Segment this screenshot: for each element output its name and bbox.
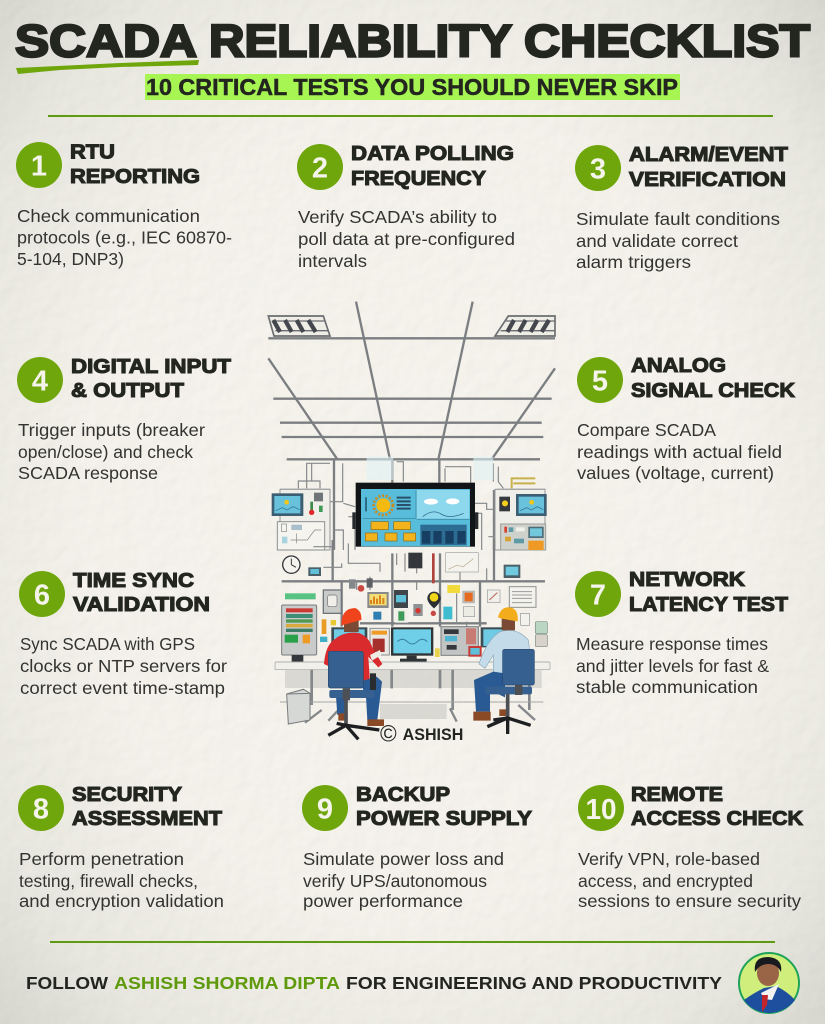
body 5 bbox=[577, 420, 782, 483]
badge 4 bbox=[17, 357, 63, 403]
badge 10: 10 bbox=[586, 794, 616, 826]
control room illustration bbox=[268, 302, 555, 747]
badge 1 bbox=[16, 142, 62, 188]
body 10 bbox=[578, 849, 801, 911]
header divider bbox=[48, 115, 773, 117]
body 6: correct event time-stamp bbox=[20, 678, 225, 698]
heading 2 bbox=[351, 142, 514, 190]
body 3 bbox=[576, 209, 780, 272]
body 9: verify UPS/autonomous bbox=[303, 871, 487, 891]
heading 10 bbox=[631, 783, 803, 830]
body 4: Trigger inputs (breaker bbox=[18, 420, 205, 440]
heading 7: NETWORK bbox=[629, 568, 745, 591]
badge 7 bbox=[575, 571, 621, 617]
desk monitors bbox=[331, 627, 506, 662]
body 5: values (voltage, current) bbox=[577, 463, 774, 483]
badge 5 bbox=[577, 357, 623, 403]
card 9: backup power supply bbox=[302, 783, 532, 911]
title bbox=[15, 16, 810, 66]
badge 9: 9 bbox=[317, 794, 333, 826]
badge 3 bbox=[575, 145, 621, 191]
card 3: alarm event verification bbox=[575, 143, 789, 272]
waste bin bbox=[287, 689, 310, 724]
heading 2: DATA POLLING bbox=[351, 142, 514, 165]
badge 8: 8 bbox=[33, 794, 49, 826]
left panel bbox=[272, 489, 330, 550]
heading 9: BACKUP bbox=[356, 783, 450, 806]
footer call to action: FOLLOW bbox=[26, 973, 109, 993]
body 2: poll data at pre-configured bbox=[298, 229, 515, 249]
title: RELIABILITY bbox=[209, 16, 512, 66]
badge 10 bbox=[578, 785, 624, 831]
badge 3: 3 bbox=[590, 154, 606, 186]
card 10: remote access check bbox=[578, 783, 803, 911]
body 10: sessions to ensure security bbox=[578, 891, 801, 911]
heading 6 bbox=[73, 569, 210, 616]
body 4: open/close) and check bbox=[18, 442, 193, 462]
lower room: desk and operators bbox=[275, 540, 550, 747]
card 2: data polling frequency bbox=[297, 142, 515, 271]
body 4: SCADA response bbox=[18, 463, 158, 483]
body 3: and validate correct bbox=[576, 231, 738, 251]
body 5: Compare SCADA bbox=[577, 420, 716, 440]
heading 6: VALIDATION bbox=[73, 593, 210, 616]
upper room: ceiling and main screen bbox=[268, 302, 555, 550]
ceiling grid bbox=[268, 302, 555, 550]
card 7: network latency test bbox=[575, 568, 788, 697]
body 3: alarm triggers bbox=[576, 252, 691, 272]
body 7: stable communication bbox=[576, 677, 758, 697]
right operator bbox=[473, 607, 534, 734]
body 1 bbox=[17, 206, 232, 269]
body 8 bbox=[19, 849, 224, 911]
body 10: Verify VPN, role-based bbox=[578, 849, 760, 869]
card 8: security assessment bbox=[18, 783, 224, 911]
footer call to action: ASHISH SHORMA DIPTA bbox=[114, 973, 340, 993]
heading 3: ALARM/EVENT bbox=[629, 143, 789, 166]
author portrait bbox=[739, 953, 799, 1013]
badge 6: 6 bbox=[34, 580, 50, 612]
heading 2: FREQUENCY bbox=[351, 167, 486, 190]
card 4: digital input and output bbox=[17, 355, 232, 483]
badge 7: 7 bbox=[590, 580, 606, 612]
body 4 bbox=[18, 420, 205, 483]
title brush underline bbox=[16, 60, 199, 74]
heading 5: ANALOG bbox=[631, 354, 726, 377]
heading 1: REPORTING bbox=[70, 165, 200, 188]
heading 6: TIME SYNC bbox=[73, 569, 194, 592]
title: SCADA bbox=[15, 16, 197, 66]
heading 3 bbox=[629, 143, 789, 191]
copyright mark bbox=[380, 721, 463, 747]
badge 2: 2 bbox=[312, 152, 328, 184]
badge 9 bbox=[302, 785, 348, 831]
heading 4 bbox=[71, 355, 232, 402]
heading 3: VERIFICATION bbox=[629, 168, 786, 191]
body 1: 5-104, DNP3) bbox=[17, 249, 124, 269]
footer divider bbox=[50, 941, 775, 943]
body 7: and jitter levels for fast & bbox=[576, 656, 769, 676]
title: CHECKLIST bbox=[524, 16, 810, 66]
body 9 bbox=[303, 849, 504, 911]
heading 7: LATENCY TEST bbox=[629, 593, 788, 616]
body 2 bbox=[298, 207, 515, 271]
card 1: RTU reporting bbox=[16, 140, 232, 269]
ceiling lights bbox=[268, 316, 555, 336]
lower conduits bbox=[282, 540, 545, 627]
body 9: power performance bbox=[303, 891, 463, 911]
badge 8 bbox=[18, 785, 64, 831]
badge 1: 1 bbox=[31, 150, 47, 182]
left control console bbox=[282, 605, 317, 662]
body 6 bbox=[20, 634, 227, 698]
heading 10: ACCESS CHECK bbox=[631, 807, 803, 830]
body 10: access, and encrypted bbox=[578, 871, 753, 891]
body 7 bbox=[576, 634, 769, 697]
body 7: Measure response times bbox=[576, 634, 768, 654]
card 5: analog signal check bbox=[577, 354, 795, 483]
right panel bbox=[495, 489, 547, 550]
wall conduits bbox=[280, 462, 545, 550]
badge 2 bbox=[297, 144, 343, 190]
body 1: protocols (e.g., IEC 60870- bbox=[17, 228, 232, 248]
badge 4: 4 bbox=[32, 366, 48, 398]
heading 9 bbox=[356, 783, 532, 830]
copyright mark: ASHISH bbox=[403, 725, 463, 744]
desk bbox=[275, 662, 550, 723]
main SCADA screen bbox=[352, 483, 478, 547]
body 8: Perform penetration bbox=[19, 849, 184, 869]
heading 10: REMOTE bbox=[631, 783, 723, 806]
badge 5: 5 bbox=[592, 366, 608, 398]
badge 6 bbox=[19, 571, 65, 617]
heading 8: SECURITY bbox=[72, 783, 182, 806]
body 6: Sync SCADA with GPS bbox=[20, 634, 195, 654]
heading 1 bbox=[70, 140, 200, 188]
footer call to action bbox=[26, 973, 722, 993]
copyright mark: © bbox=[380, 721, 397, 747]
body 5: readings with actual field bbox=[577, 442, 782, 462]
body 3: Simulate fault conditions bbox=[576, 209, 780, 229]
body 2: intervals bbox=[298, 251, 367, 271]
body 8: and encryption validation bbox=[19, 891, 224, 911]
left operator bbox=[324, 608, 384, 739]
footer call to action: FOR ENGINEERING AND PRODUCTIVITY bbox=[346, 973, 722, 993]
heading 9: POWER SUPPLY bbox=[356, 807, 532, 830]
body 1: Check communication bbox=[17, 206, 200, 226]
body 8: testing, firewall checks, bbox=[19, 871, 198, 891]
heading 4: & OUTPUT bbox=[71, 379, 185, 402]
card 6: time sync validation bbox=[19, 569, 227, 698]
wall devices bbox=[285, 553, 547, 647]
heading 1: RTU bbox=[70, 140, 115, 164]
subtitle: 10 CRITICAL TESTS YOU SHOULD NEVER SKIP bbox=[146, 74, 678, 100]
heading 5 bbox=[631, 354, 795, 402]
heading 5: SIGNAL CHECK bbox=[631, 379, 795, 402]
body 9: Simulate power loss and bbox=[303, 849, 504, 869]
heading 8: ASSESSMENT bbox=[72, 807, 223, 830]
body 2: Verify SCADA’s ability to bbox=[298, 207, 497, 227]
wall clock bbox=[283, 556, 300, 573]
heading 7 bbox=[629, 568, 788, 616]
heading 4: DIGITAL INPUT bbox=[71, 355, 232, 378]
heading 8 bbox=[72, 783, 223, 830]
body 6: clocks or NTP servers for bbox=[20, 656, 227, 676]
